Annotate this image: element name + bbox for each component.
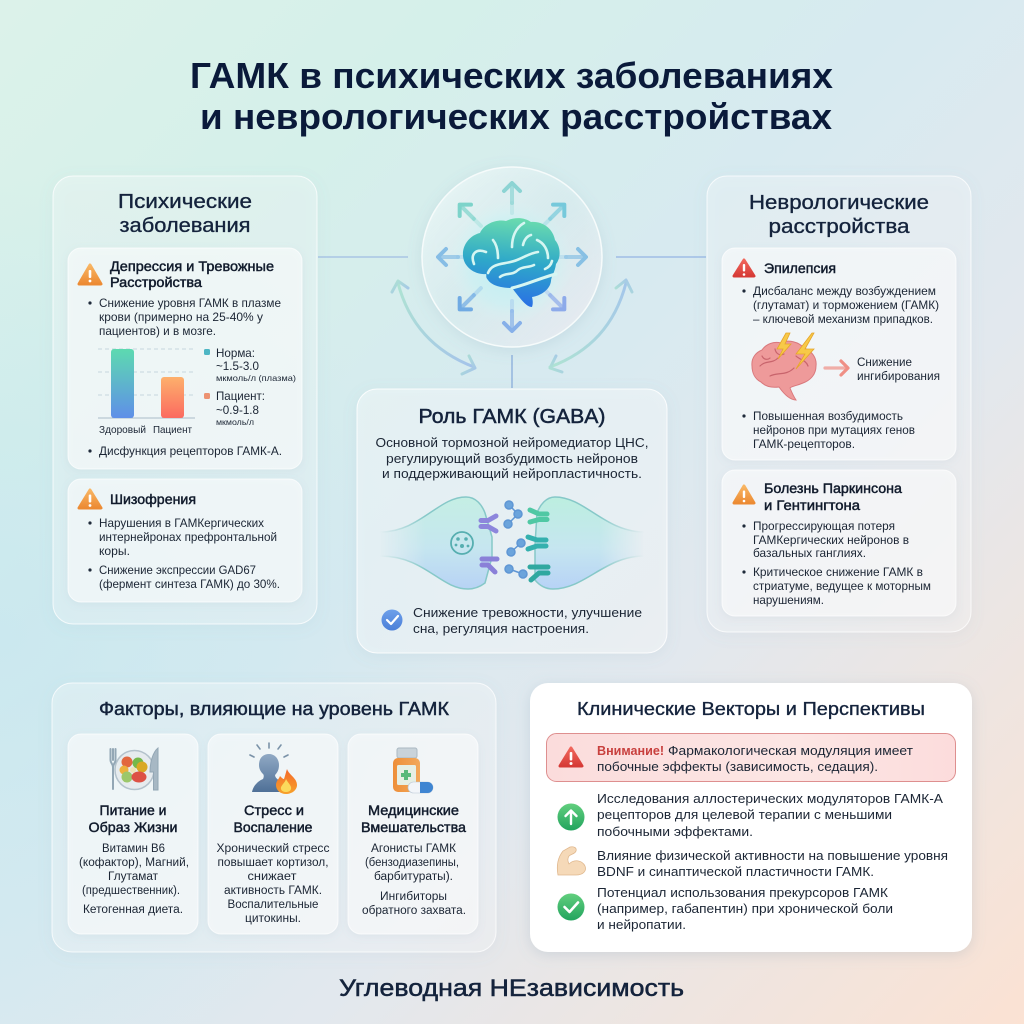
text: Ингибиторы (380, 891, 447, 903)
description (376, 435, 648, 481)
title: и неврологических расстройствах (200, 96, 832, 137)
icon: red warning (734, 260, 754, 276)
text: повышает кортизол, (218, 857, 328, 869)
benefits text: Снижение тревожности, улучшение (413, 605, 642, 620)
item: physical activity (557, 847, 948, 879)
bullet text (88, 516, 280, 591)
heading: Шизофрения (110, 492, 196, 507)
bar chart: Здоровый (99, 424, 146, 436)
text: снижает (248, 871, 297, 883)
title (190, 55, 833, 137)
card: stress (208, 734, 338, 934)
connector lines from the central sphere (318, 257, 706, 388)
purple receptors (481, 516, 497, 572)
text: Глутамат (108, 871, 159, 883)
bullet text (88, 296, 281, 338)
heading: neurological disorders (749, 192, 929, 238)
heading (110, 259, 274, 290)
bullet text: Нарушения в ГАМКергических (99, 516, 264, 530)
callout: warning: Внимание! (597, 743, 664, 758)
legend: Пациент: (216, 389, 265, 403)
bullet text (742, 409, 915, 451)
text (362, 843, 466, 917)
bullet text: нарушениям. (753, 593, 824, 607)
bullet text: Дисбаланс между возбуждением (753, 284, 936, 298)
heading: mental disorders: Психические (118, 191, 252, 213)
heading: Факторы, влияющие на уровень ГАМК (99, 699, 450, 719)
bar chart: Пациент (153, 424, 192, 436)
card: nutrition (68, 734, 198, 934)
heading: Клинические Векторы и Перспективы (577, 699, 925, 719)
icon: red arrow (825, 361, 848, 375)
label: reduced inhibition (857, 357, 940, 383)
heading (361, 802, 466, 835)
bullet text: стриатуме, ведущее к моторным (753, 579, 931, 593)
bullet text: (глутамат) и торможением (ГАМК) (753, 298, 939, 312)
heading: Воспаление (234, 819, 313, 835)
item: allosteric modulators: Исследования аллостерических модуляторов ГАМК-А (597, 791, 943, 806)
GABA molecules (504, 501, 527, 578)
bullet text: Снижение уровня ГАМК в плазме (99, 296, 281, 310)
heading: neurological disorders: расстройства (768, 216, 910, 238)
synapse illustration (380, 497, 644, 589)
bullet text: Снижение экспрессии GAD67 (99, 563, 256, 577)
card: epilepsy (722, 248, 956, 460)
card: depression and anxiety (68, 248, 302, 469)
text: Агонисты ГАМК (371, 843, 456, 855)
icon: medicine bottle and pill (393, 748, 433, 793)
heading: Медицинские (368, 802, 459, 818)
icon: stressed person with flame (250, 743, 297, 794)
item: allosteric modulators: рецепторов для целевой терапии с меньшими (597, 807, 892, 822)
item: GABA precursors (558, 885, 893, 932)
icon: check (382, 610, 402, 630)
panel: factors (52, 683, 496, 952)
panel: neurological disorders (707, 176, 971, 632)
text: Витамин B6 (102, 843, 165, 855)
icon: radiating arrows (438, 183, 586, 331)
bullet text: базальных ганглиях. (753, 546, 866, 560)
heading: Питание и (100, 802, 166, 818)
item: GABA precursors: (например, габапентин) при хронической боли (597, 901, 893, 916)
icon: curved arrow left (392, 281, 475, 374)
heading: и Гентингтона (764, 498, 861, 513)
description: Основной тормозной нейромедиатор ЦНС, (376, 435, 648, 450)
bullet text: крови (примерно на 25-40% у (99, 310, 263, 324)
bullet text: Критическое снижение ГАМК в (753, 565, 923, 579)
text: (предшественник). (82, 885, 180, 897)
callout: warning: Фармакологическая модуляция имеет (668, 743, 913, 758)
icon: red warning (560, 748, 582, 766)
card: medical interventions (348, 734, 478, 934)
bullet text: коры. (99, 544, 130, 558)
heading: mental disorders (118, 191, 252, 237)
icon: orange warning (79, 265, 101, 284)
bullet text: ГАМК-рецепторов. (753, 437, 855, 451)
neurons (380, 497, 644, 589)
icon: green up arrow (558, 804, 584, 830)
legend: мкмоль/л (плазма) (216, 373, 296, 383)
icon: orange warning (79, 490, 101, 508)
bullet text: Повышенная возбудимость (753, 409, 903, 423)
benefits text: сна, регуляция настроения. (413, 621, 589, 636)
heading: Расстройства (110, 275, 203, 290)
heading (234, 802, 313, 835)
bullet text: интернейронах префронтальной (99, 530, 277, 544)
item: allosteric modulators: побочными эффектами. (597, 824, 753, 839)
card: schizophrenia (68, 479, 302, 602)
card: Parkinson and Huntington (722, 470, 956, 616)
heading: mental disorders: заболевания (120, 215, 250, 237)
icon: orange warning (734, 486, 754, 503)
legend: мкмоль/л (216, 417, 254, 427)
heading: Образ Жизни (88, 819, 178, 835)
icon: pink brain with lightning (752, 333, 816, 400)
text: Кетогенная диета. (83, 904, 183, 916)
icon: plate (110, 748, 158, 790)
text: Воспалительные (228, 899, 318, 911)
icon: flexed arm (557, 847, 586, 875)
text: активность ГАМК. (224, 885, 322, 897)
bullet text: пациентов) и в мозге. (99, 324, 216, 338)
text (216, 843, 330, 925)
heading: Стресс и (244, 802, 304, 818)
heading: Болезнь Паркинсона (764, 481, 903, 496)
central sphere with brain (422, 167, 602, 347)
callout: warning: побочные эффекты (зависимость, седация). (597, 759, 878, 774)
heading: Роль ГАМК (GABA) (418, 406, 606, 428)
footer: Углеводная НЕзависимость (339, 975, 684, 1002)
panel: role of GABA (357, 389, 667, 653)
bullet text (742, 519, 931, 607)
bullet text: – ключевой механизм припадков. (753, 312, 933, 326)
heading (88, 802, 178, 835)
panel: mental disorders (53, 176, 317, 624)
label: reduced inhibition: ингибирования (857, 371, 940, 383)
legend: Норма: (216, 346, 255, 360)
text (79, 843, 189, 916)
text: Хронический стресс (216, 843, 330, 855)
heading: Депрессия и Тревожные (110, 259, 274, 274)
text: обратного захвата. (362, 905, 466, 917)
green receptors (528, 510, 548, 580)
description: регулирующий возбудимость нейронов (386, 451, 638, 466)
legend: ~0.9-1.8 (216, 403, 259, 417)
bar chart (98, 349, 195, 436)
bullet text: (фермент синтеза ГАМК) до 30%. (99, 577, 280, 591)
item: GABA precursors: Потенциал использования прекурсоров ГАМК (597, 885, 888, 900)
callout: warning (546, 734, 956, 782)
heading (764, 481, 903, 513)
bullet text: Дисфункция рецепторов ГАМК-А. (99, 444, 282, 458)
benefits text (413, 605, 642, 636)
item: GABA precursors: и нейропатии. (597, 917, 686, 932)
item: allosteric modulators (558, 791, 943, 839)
text: цитокины. (245, 913, 301, 925)
text: барбитураты). (374, 871, 453, 883)
heading: neurological disorders: Неврологические (749, 192, 929, 214)
label: reduced inhibition: Снижение (857, 357, 912, 369)
legend (204, 346, 296, 427)
legend: ~1.5-3.0 (216, 359, 259, 373)
icon: green check (558, 894, 584, 920)
vesicle (451, 532, 473, 554)
text: (кофактор), Магний, (79, 857, 189, 869)
icon: brain (463, 218, 560, 307)
bullet text: нейронов при мутациях генов (753, 423, 915, 437)
bullet text: Прогрессирующая потеря (753, 519, 895, 533)
icon: curved arrow right (550, 280, 632, 372)
bullet text (742, 284, 939, 326)
heading: Эпилепсия (764, 261, 836, 276)
bullet text: ГАМКергических нейронов в (753, 533, 909, 547)
text: (бензодиазепины, (365, 857, 459, 869)
title: ГАМК в психических заболеваниях (190, 55, 833, 96)
item: physical activity: Влияние физической активности на повышение уровня (597, 848, 948, 863)
heading: Вмешательства (361, 819, 466, 835)
panel: clinical vectors (530, 683, 972, 952)
item: physical activity: BDNF и синаптической пластичности ГАМК. (597, 864, 874, 879)
description: и поддерживающий нейропластичность. (382, 466, 642, 481)
